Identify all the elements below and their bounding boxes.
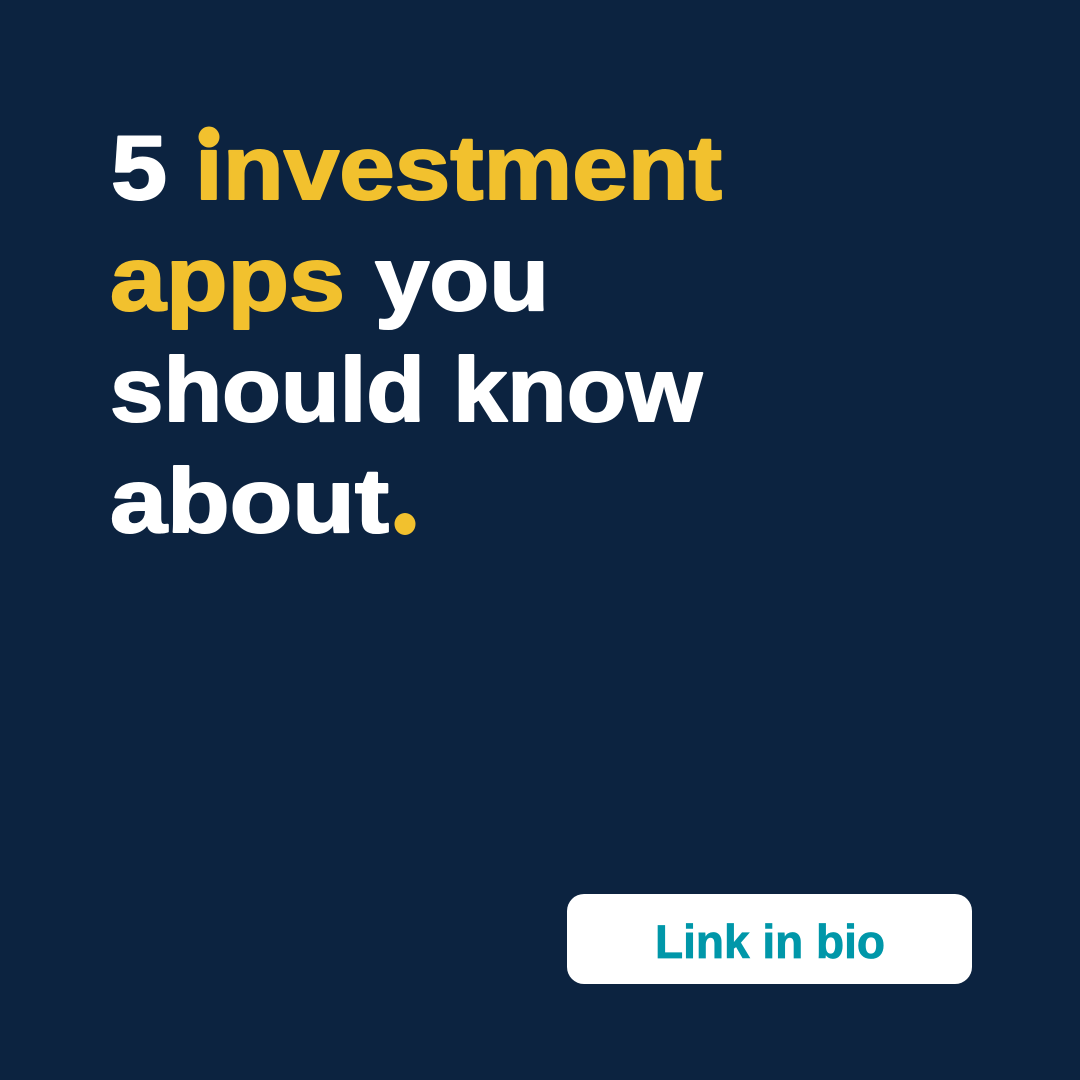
title line 1: 5 investment: investment (195, 118, 722, 219)
title line 4: about.: . (392, 451, 417, 552)
title line 3: should know (110, 340, 702, 441)
title line 3: should know: know (453, 340, 702, 441)
title line 2: apps you (110, 229, 549, 330)
title (110, 118, 722, 552)
title line 4: about.: about (110, 451, 389, 552)
button: link in bio (567, 894, 972, 984)
title line 1: 5 investment: 5 (111, 118, 167, 219)
button: link in bio: Link in bio (655, 915, 885, 968)
title line 2: apps you: apps (110, 229, 345, 330)
title line 2: apps you: you (375, 229, 549, 330)
title line 3: should know: should (110, 340, 425, 441)
